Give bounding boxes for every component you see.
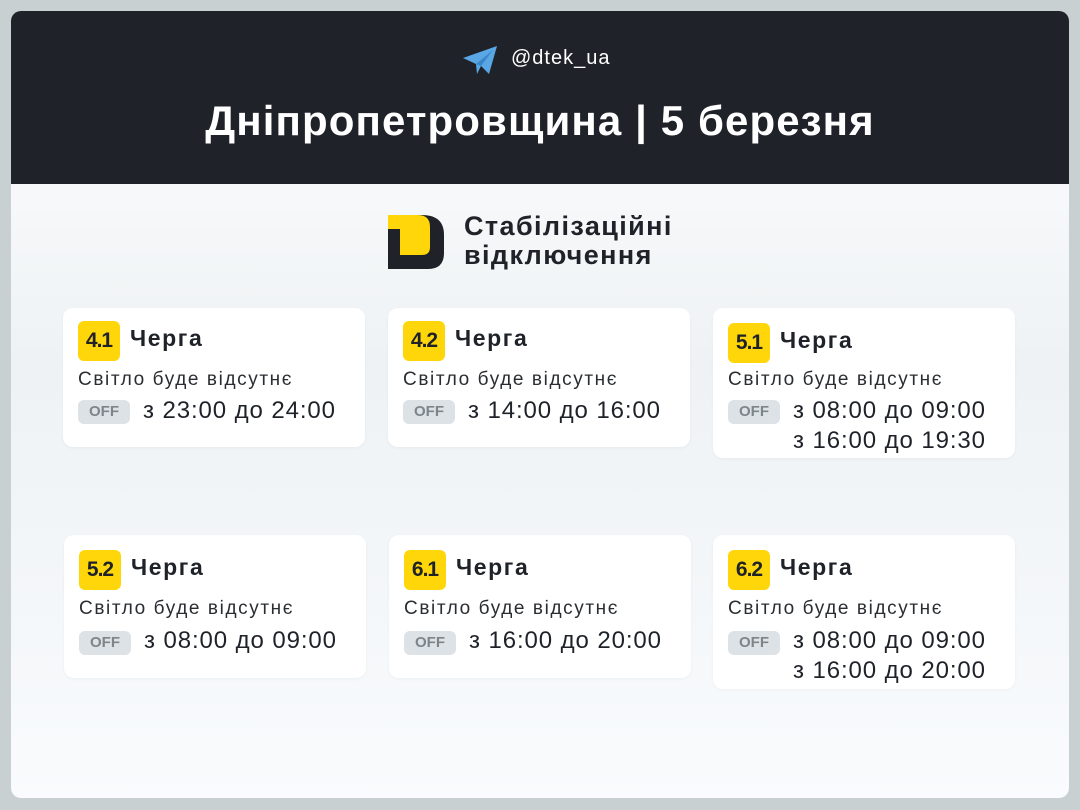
card 4.1: 4.1: [86, 329, 112, 352]
card 4.1: з 23:00 до 24:00: [143, 397, 336, 424]
card 4.1: Світло буде відсутнє: [78, 369, 293, 390]
card 6.1: 6.1: [412, 558, 438, 581]
card 4.1: OFF: [89, 403, 119, 420]
card 5.1: Черга: [780, 327, 853, 353]
card 4.2: Черга: [455, 325, 528, 351]
logo: D icon: [388, 215, 444, 269]
card 5.2: Світло буде відсутнє: [79, 598, 294, 619]
card 5.2: OFF: [90, 634, 120, 651]
subtitle: відключення: [464, 240, 653, 270]
card 4.2: OFF: [414, 403, 444, 420]
card 6.2: Світло буде відсутнє: [728, 598, 943, 619]
card 5.1: Світло буде відсутнє: [728, 369, 943, 390]
card 4.2: Світло буде відсутнє: [403, 369, 618, 390]
card 6.2: [713, 535, 1015, 689]
subtitle: Стабілізаційні: [464, 211, 673, 241]
card 6.2: 6.2: [736, 558, 762, 581]
card 6.1: Світло буде відсутнє: [404, 598, 619, 619]
card 5.2: [64, 535, 366, 678]
card 4.1: [63, 308, 365, 447]
card 5.1: [713, 308, 1015, 458]
card 6.2: з 08:00 до 09:00: [793, 627, 986, 654]
card 4.2: з 14:00 до 16:00: [468, 397, 661, 424]
card 5.2: 5.2: [87, 558, 113, 581]
card 5.1: з 16:00 до 19:30: [793, 427, 986, 454]
card 5.1: з 08:00 до 09:00: [793, 397, 986, 424]
card 5.2: з 08:00 до 09:00: [144, 627, 337, 654]
card 6.1: Черга: [456, 554, 529, 580]
card 5.2: Черга: [131, 554, 204, 580]
header band: [11, 11, 1069, 184]
card 4.2: 4.2: [411, 329, 437, 352]
subtitle: [464, 211, 673, 270]
card 4.1: Черга: [130, 325, 203, 351]
card 5.1: OFF: [739, 403, 769, 420]
icon: telegram: [463, 46, 497, 74]
handle text: @dtek_ua: [511, 47, 610, 69]
card 6.2: з 16:00 до 20:00: [793, 657, 986, 684]
card 6.2: OFF: [739, 634, 769, 651]
card 4.2: [388, 308, 690, 447]
title: Дніпропетровщина | 5 березня: [205, 97, 875, 144]
card 5.1: 5.1: [736, 331, 762, 354]
card 6.2: Черга: [780, 554, 853, 580]
card 6.1: OFF: [415, 634, 445, 651]
card 6.1: з 16:00 до 20:00: [469, 627, 662, 654]
card 6.1: [389, 535, 691, 678]
